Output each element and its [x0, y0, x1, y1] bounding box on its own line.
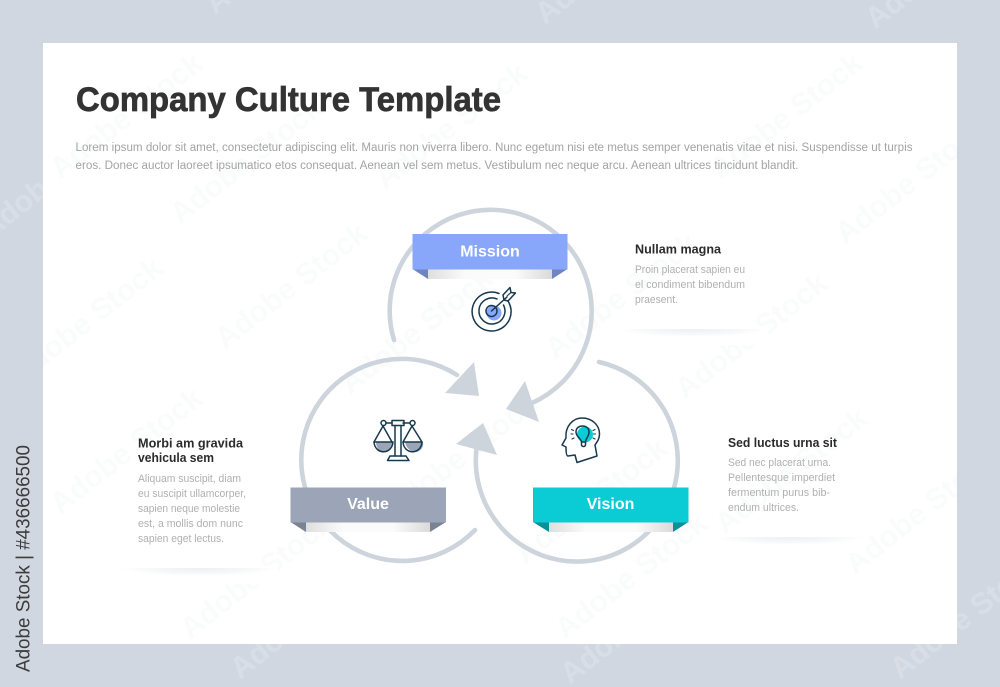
- text: Adobe Stock: [174, 506, 339, 646]
- text: Adobe Stock: [209, 216, 374, 356]
- ribbon: vision: Vision: [587, 496, 634, 513]
- text: Adobe Stock: [44, 46, 209, 186]
- arrow: value arc: [301, 359, 479, 561]
- callout: vision text: Sed nec placerat urna.: [728, 457, 831, 469]
- callout: value text: Aliquam suscipit, diam: [138, 473, 241, 485]
- title: Company Culture Template: [76, 81, 501, 119]
- callout: value text: sapien eget lectus.: [138, 533, 224, 545]
- callout: mission text: Nullam magna: [635, 242, 722, 256]
- text: Adobe Stock: [554, 551, 719, 687]
- arrow: vision arc: [456, 362, 678, 562]
- callout: vision text: fermentum purus bib-: [728, 487, 830, 499]
- callout: mission text: praesent.: [635, 294, 678, 306]
- text: Adobe Stock: [549, 506, 714, 646]
- text: Adobe Stock: [379, 386, 544, 526]
- ribbon: mission: [412, 234, 568, 279]
- icon: target with arrow: [472, 288, 516, 331]
- text: Adobe Stock: [704, 46, 869, 186]
- callout: value text: est, a mollis dom nunc: [138, 518, 243, 530]
- icon: head with light bulb: [562, 418, 600, 462]
- text: Adobe Stock: [509, 431, 674, 571]
- diagram: three cycle arrows: [301, 210, 678, 562]
- callout: mission text: [618, 242, 768, 345]
- text: Adobe Stock: [829, 111, 994, 251]
- callout: vision text: Pellentesque imperdiet: [728, 472, 835, 484]
- ribbon: value: [290, 488, 446, 532]
- ribbon: vision: [533, 488, 688, 532]
- icon: balance scales: [374, 420, 423, 460]
- callout: vision text: [715, 436, 865, 553]
- text: Adobe Stock: [44, 381, 209, 521]
- stock id label: Adobe Stock | #436666500: [14, 445, 34, 672]
- background card: [43, 43, 957, 644]
- text: Adobe Stock: [4, 251, 169, 391]
- callout: value text: Morbi am gravida: [138, 436, 244, 450]
- intro text block: [76, 142, 913, 172]
- arrow: mission arc: [390, 210, 592, 422]
- ribbon: mission: Mission: [460, 244, 520, 260]
- text: Adobe Stock: [224, 546, 389, 686]
- text: Adobe Stock: [369, 56, 534, 196]
- intro text block: eros. Donec auctor laoreet ipsumatico etos consequat. Aenean vel sem metus. Vestibulum nec neque arcu. Aenean ultrices tincidunt blandit.: [76, 160, 798, 172]
- ribbon: value: Value: [347, 496, 389, 513]
- text: Adobe Stock: [709, 401, 874, 541]
- intro text block: Lorem ipsum dolor sit amet, consectetur adipiscing elit. Mauris non viverra libero. Nunc egetum nisi ete metus semper venenatis vitae et nisi. Suspendisse ut turpis: [76, 142, 913, 154]
- callout: value text: vehicula sem: [138, 451, 214, 465]
- callout: vision text: endum ultrices.: [728, 502, 799, 514]
- callout: mission text: el condiment bibendum: [635, 279, 745, 291]
- text: Adobe Stock: [839, 441, 1000, 581]
- text: Adobe Stock: [334, 261, 499, 401]
- callout: value text: eu suscipit ullamcorper,: [138, 488, 246, 500]
- callout: value text: [120, 436, 278, 584]
- text: Adobe Stock: [164, 91, 329, 231]
- text: Adobe Stock: [669, 266, 834, 406]
- callout: value text: sapien neque molestie: [138, 503, 240, 515]
- callout: vision text: Sed luctus urna sit: [728, 436, 838, 450]
- callout: mission text: Proin placerat sapien eu: [635, 264, 745, 276]
- text: Adobe Stock: [539, 226, 704, 366]
